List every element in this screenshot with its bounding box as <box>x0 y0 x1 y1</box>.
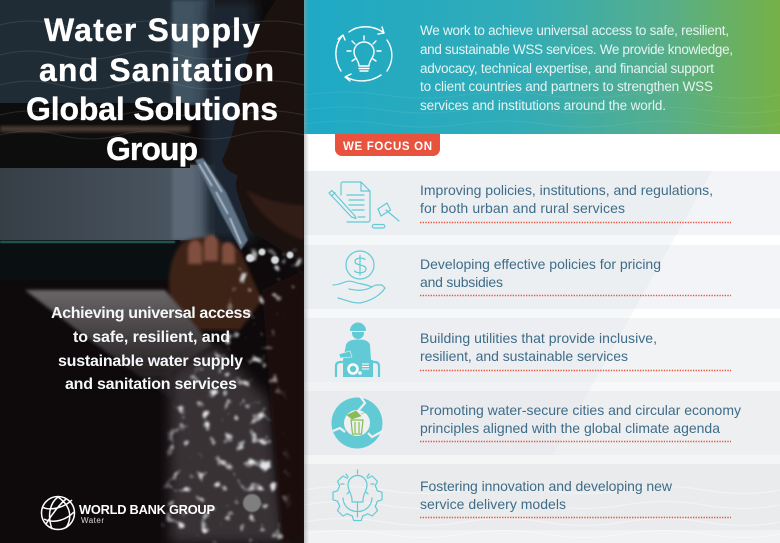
title: Water Supply <box>44 12 260 48</box>
row 5: innovation <box>333 470 731 521</box>
panel: intro gradient banner <box>304 0 780 134</box>
subtitle <box>51 305 251 393</box>
intro text: to client countries and partners to strengthen WSS <box>420 79 713 94</box>
row 1: policies: Improving policies, institutions, and regulations, <box>420 182 713 198</box>
intro text <box>420 23 733 113</box>
row 5: innovation: Fostering innovation and developing new <box>420 478 673 494</box>
intro text: services and institutions around the world. <box>420 98 666 113</box>
panel: white right background <box>304 0 780 543</box>
title: Global Solutions <box>26 91 278 127</box>
subtitle: sustainable water supply <box>58 353 243 370</box>
row 3: utilities: Building utilities that provide inclusive, <box>420 330 657 346</box>
title: and Sanitation <box>39 52 274 88</box>
panel shadow edge <box>304 0 309 543</box>
row 1: policies <box>329 182 731 228</box>
subtitle: and sanitation services <box>65 376 237 393</box>
logo: World Bank Group Water: Water <box>81 516 104 525</box>
icon: coin over open hand <box>333 251 385 303</box>
heading tab: we focus on: WE FOCUS ON <box>343 141 432 153</box>
row 4: circular economy: principles aligned with the global climate agenda <box>420 420 720 436</box>
subtitle: to safe, resilient, and <box>73 329 230 346</box>
logo: World Bank Group Water <box>42 496 215 530</box>
title <box>26 12 278 167</box>
intro text: advocacy, technical expertise, and financial support <box>420 61 714 76</box>
row 4: circular economy: Promoting water-secure cities and circular economy <box>420 402 741 418</box>
water splashes <box>150 245 304 543</box>
row 2: pricing <box>333 251 731 303</box>
row 3: utilities <box>336 322 731 377</box>
icon: document, pen and gavel <box>329 182 399 228</box>
icon: lightbulb with cycle arrows <box>336 27 392 81</box>
row 3: utilities: resilient, and sustainable services <box>420 348 628 364</box>
icon: lightbulb in gear <box>333 470 382 521</box>
panel: focus row backgrounds <box>304 171 780 543</box>
intro text: We work to achieve universal access to safe, resilient, <box>420 23 729 38</box>
intro text: and sustainable WSS services. We provide knowledge, <box>420 42 733 57</box>
logo: World Bank Group Water: WORLD BANK GROUP <box>79 502 215 517</box>
row 1: policies: for both urban and rural services <box>420 200 625 216</box>
heading tab: we focus on <box>335 134 440 156</box>
row 2: pricing: and subsidies <box>420 274 503 290</box>
row 2: pricing: Developing effective policies for pricing <box>420 256 661 272</box>
icon: worker with control panel <box>336 322 379 377</box>
row 5: innovation: service delivery models <box>420 496 566 512</box>
subtitle: Achieving universal access <box>51 305 251 322</box>
panel: photo of person drinking water <box>0 0 304 543</box>
row 4: circular economy <box>332 396 741 448</box>
title: Group <box>106 131 198 167</box>
icon: circular arrows with recycling bin <box>332 396 383 448</box>
